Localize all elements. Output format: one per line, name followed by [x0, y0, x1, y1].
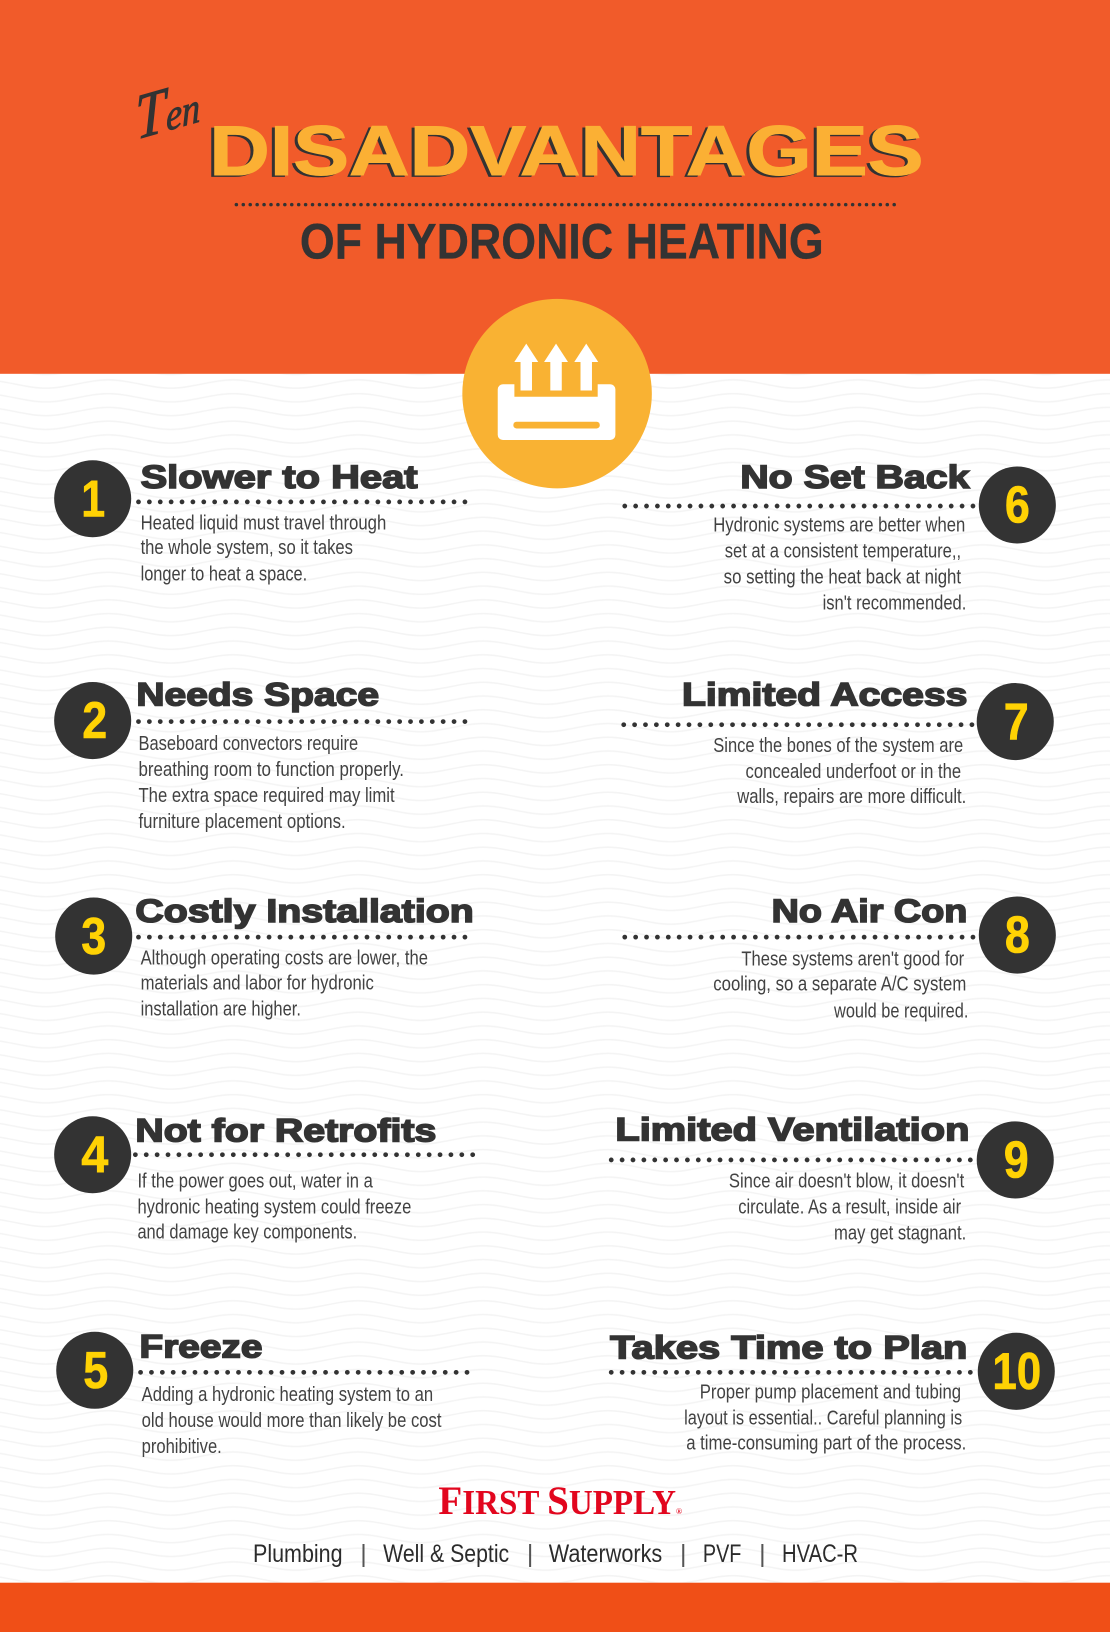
dotted rule 9 — [611, 1158, 975, 1162]
title script word: Ten: Ten — [134, 63, 201, 154]
body 6: set at a consistent temperature,, — [725, 540, 961, 562]
body 2 — [138, 733, 404, 833]
number badge 4 — [54, 1116, 131, 1193]
number badge 8 — [979, 897, 1056, 974]
footer service list: HVAC-R — [782, 1540, 858, 1568]
heading 2: Needs Space — [136, 676, 379, 712]
heading 8: No Air Con — [772, 893, 967, 929]
body 10 — [684, 1382, 966, 1455]
title main word: Disadvantages: DISADVANTAGES — [206, 113, 920, 192]
item 10: Takes Time to Plan — [610, 1329, 1055, 1455]
number badge 7 — [977, 683, 1054, 760]
body 1: longer to heat a space. — [141, 563, 307, 585]
body 6: isn't recommended. — [823, 592, 966, 614]
header band — [0, 0, 1110, 374]
body 8: cooling, so a separate A/C system — [713, 974, 966, 996]
footer service list: Well & Septic — [383, 1540, 509, 1568]
heading 7: Limited Access — [682, 676, 967, 712]
item 8: No Air Con — [625, 893, 1056, 1023]
body 7: walls, repairs are more difficult. — [736, 786, 966, 808]
body 9: circulate. As a result, inside air — [738, 1196, 961, 1218]
item 1: Slower to Heat — [54, 459, 468, 585]
number badge 5 — [56, 1332, 133, 1409]
logo: First Supply: FIRST SUPPLY® — [438, 1478, 682, 1523]
body 3 — [141, 948, 428, 1021]
item 2: Needs Space — [54, 676, 468, 833]
body 2: breathing room to function properly. — [138, 759, 404, 781]
number badge 3: 3 — [81, 908, 106, 966]
dotted rule 6 — [625, 504, 977, 508]
dotted rule 8 — [625, 935, 977, 939]
heading 3: Costly Installation — [135, 893, 474, 929]
body 7: concealed underfoot or in the — [746, 761, 961, 783]
title dotted rule — [236, 203, 894, 206]
body 3: installation are higher. — [141, 999, 301, 1021]
body 4: If the power goes out, water in a — [137, 1170, 374, 1192]
item 5: Freeze — [56, 1328, 470, 1458]
footer service list: Plumbing — [253, 1540, 343, 1568]
body 8 — [713, 949, 968, 1023]
title — [134, 63, 924, 270]
number badge 3 — [55, 898, 132, 975]
body 6 — [713, 514, 966, 614]
body 7 — [713, 735, 966, 808]
number badge 2: 2 — [82, 692, 107, 750]
body 4 — [137, 1170, 411, 1243]
body 8: These systems aren't good for — [741, 949, 965, 971]
number badge 1 — [54, 460, 131, 537]
body 9: may get stagnant. — [834, 1222, 966, 1244]
body 5: old house would more than likely be cost — [142, 1410, 442, 1432]
number badge 10 — [978, 1333, 1055, 1410]
footer service list: | — [759, 1540, 766, 1568]
dotted rule 2 — [138, 719, 468, 724]
heading 5: Freeze — [140, 1328, 262, 1364]
footer service list: Waterworks — [549, 1540, 662, 1568]
number badge 9: 9 — [1004, 1132, 1029, 1190]
body 4: hydronic heating system could freeze — [137, 1196, 411, 1218]
footer band — [0, 1583, 1110, 1632]
body 10: layout is essential.. Careful planning is — [684, 1408, 962, 1430]
heading 6: No Set Back — [740, 459, 969, 495]
body 5 — [142, 1384, 442, 1458]
item 4: Not for Retrofits — [54, 1113, 475, 1243]
title main word: Disadvantages: DISADVANTAGES — [209, 112, 924, 191]
heading 9: Limited Ventilation — [615, 1112, 969, 1148]
footer service list: | — [680, 1540, 686, 1568]
footer service list: PVF — [703, 1540, 741, 1568]
heading 10: Takes Time to Plan — [610, 1329, 967, 1365]
number badge 9 — [977, 1121, 1054, 1198]
item 9: Limited Ventilation — [611, 1112, 1054, 1244]
item 7: Limited Access — [624, 676, 1054, 808]
body 8: would be required. — [833, 1001, 968, 1023]
number badge 2 — [54, 682, 131, 759]
body 5: Adding a hydronic heating system to an — [142, 1384, 433, 1406]
title subheading: OF HYDRONIC HEATING — [300, 214, 824, 270]
body 3: materials and labor for hydronic — [141, 972, 374, 994]
number badge 6 — [979, 466, 1056, 544]
icon: baseboard heater with rising heat arrows — [462, 299, 652, 488]
dotted rule 5 — [141, 1370, 470, 1375]
heading 1: Slower to Heat — [141, 459, 418, 495]
body 9 — [729, 1170, 966, 1244]
body 7: Since the bones of the system are — [713, 735, 963, 757]
body 1: the whole system, so it takes — [141, 537, 353, 559]
body 1 — [141, 512, 386, 585]
body 4: and damage key components. — [137, 1221, 357, 1243]
footer service list — [253, 1540, 858, 1568]
number badge 8: 8 — [1005, 907, 1030, 965]
number badge 4: 4 — [81, 1126, 108, 1184]
body 2: The extra space required may limit — [138, 785, 395, 807]
body 5: prohibitive. — [142, 1436, 222, 1458]
number badge 7: 7 — [1004, 693, 1029, 751]
body 10: Proper pump placement and tubing — [700, 1382, 961, 1404]
dotted rule 1 — [138, 500, 468, 504]
dotted rule 10 — [611, 1370, 975, 1375]
body 10: a time-consuming part of the process. — [686, 1433, 966, 1455]
body 3: Although operating costs are lower, the — [141, 948, 428, 970]
body 1: Heated liquid must travel through — [141, 512, 386, 534]
dotted rule 7 — [624, 722, 977, 727]
footer service list: | — [360, 1540, 367, 1568]
body 6: so setting the heat back at night — [724, 566, 961, 588]
dotted rule 4 — [135, 1152, 475, 1157]
number badge 1: 1 — [81, 470, 105, 528]
body 6: Hydronic systems are better when — [713, 514, 965, 536]
item 6: No Set Back — [625, 459, 1056, 614]
item 3: Costly Installation — [55, 893, 474, 1021]
body 9: Since air doesn't blow, it doesn't — [729, 1170, 965, 1192]
dotted rule 3 — [138, 935, 472, 939]
footer service list: | — [527, 1540, 533, 1568]
number badge 6: 6 — [1005, 477, 1030, 535]
number badge 10: 10 — [992, 1343, 1041, 1401]
body 2: Baseboard convectors require — [138, 733, 358, 755]
heading 4: Not for Retrofits — [135, 1113, 436, 1149]
number badge 5: 5 — [83, 1342, 108, 1400]
body 2: furniture placement options. — [138, 811, 346, 833]
